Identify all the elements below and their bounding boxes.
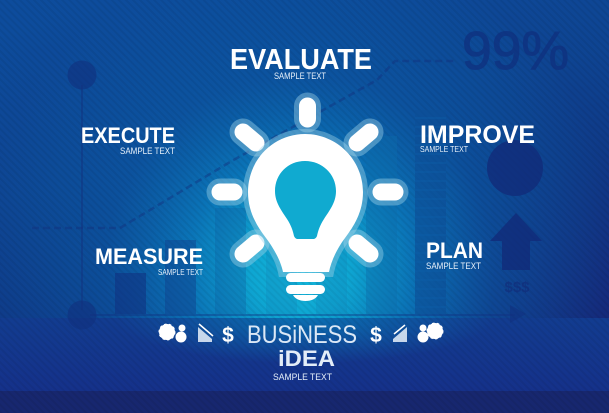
icon: left dollar: $: [222, 324, 234, 347]
heading: plan: PLAN: [426, 238, 483, 263]
footer title: BUSiNESS: [247, 321, 357, 349]
bar chart: [115, 110, 446, 314]
heading: execute: EXECUTE: [81, 123, 175, 148]
99%: 99%: [462, 21, 569, 81]
heading: improve: IMPROVE: [420, 121, 535, 149]
up arrow: [490, 213, 542, 270]
dark circle: [487, 140, 543, 196]
rays: [220, 106, 395, 254]
background chart: [32, 21, 569, 330]
heading: measure: SAMPLE TEXT: [158, 267, 203, 277]
dashed trend line: [32, 61, 455, 228]
axes: [68, 60, 526, 330]
footer title: iDEA: [278, 346, 335, 371]
icon: right dollar: $: [370, 324, 382, 347]
footer title: [247, 321, 357, 383]
bulb glass: [248, 134, 363, 272]
heading: evaluate: EVALUATE: [230, 44, 372, 76]
heading: execute: SAMPLE TEXT: [120, 146, 175, 156]
heading: evaluate: SAMPLE TEXT: [274, 71, 326, 81]
icon: right rising chart: [393, 325, 407, 342]
bulb inner: [275, 161, 336, 239]
lightbulb icon: [220, 106, 395, 301]
icon: left falling chart: [198, 324, 213, 342]
icon: left gears: [159, 324, 186, 342]
dollars: $$$: [504, 279, 530, 296]
icon: right gears: [418, 323, 443, 342]
heading: plan: SAMPLE TEXT: [426, 261, 481, 271]
heading: improve: SAMPLE TEXT: [420, 144, 468, 154]
heading: measure: MEASURE: [95, 244, 203, 269]
bulb base: [286, 273, 325, 301]
footer title: SAMPLE TEXT: [273, 372, 332, 383]
